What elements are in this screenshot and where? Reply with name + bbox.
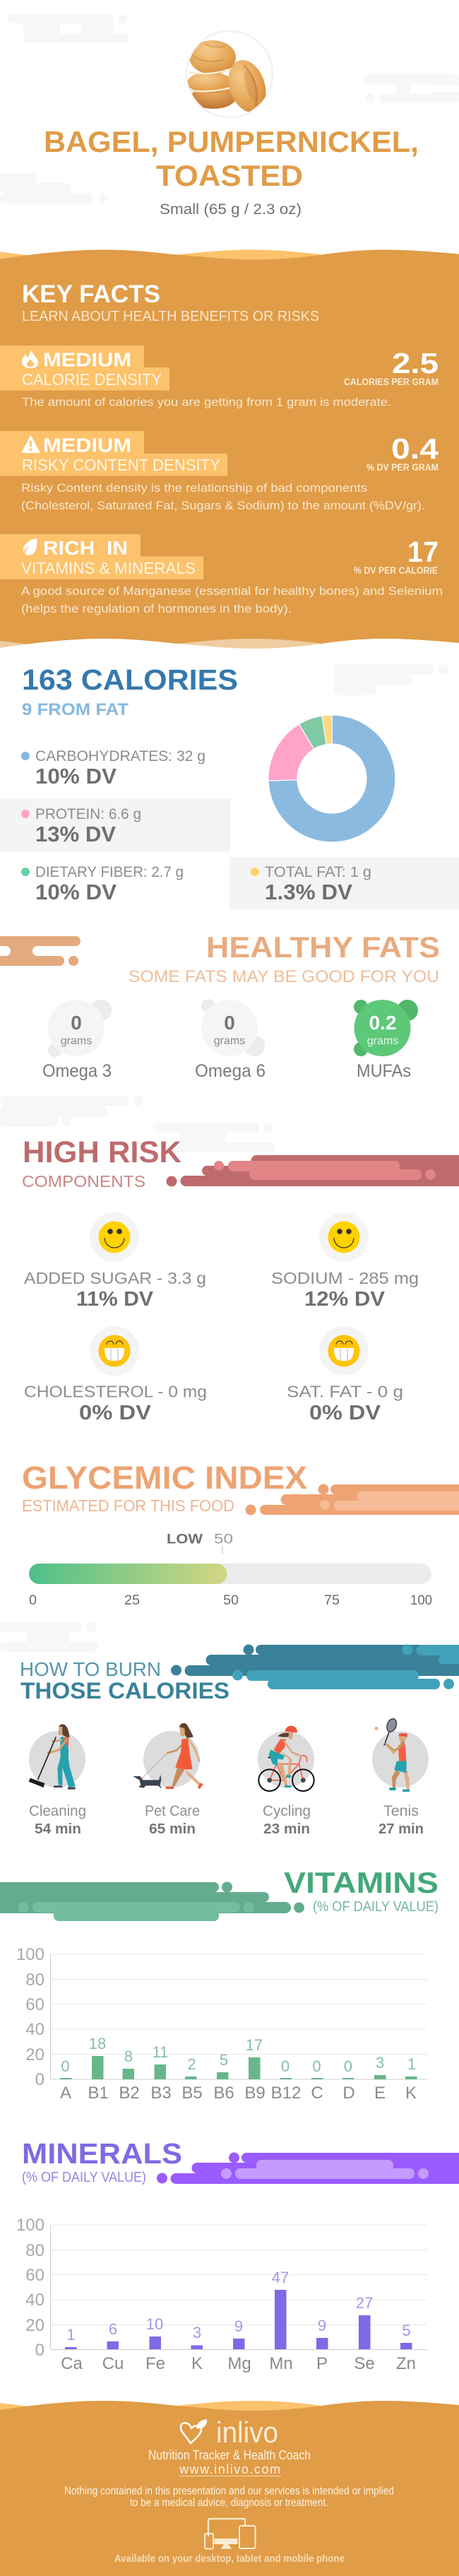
bar chart: vitamins: 20 [25, 2045, 44, 2064]
fact: vitamins and minerals: % DV PER CALORIE [354, 565, 438, 576]
fact: calorie density: MEDIUM [43, 349, 131, 370]
bar chart: minerals: Fe [145, 2354, 165, 2373]
gauge: glycemic index [29, 1532, 432, 1608]
heading: calories [22, 663, 238, 719]
logo: inlivo [181, 2416, 278, 2449]
heading: minerals [22, 2137, 182, 2185]
disclaimer [64, 2486, 394, 2509]
bar chart: minerals: P [316, 2354, 328, 2373]
heading: minerals: MINERALS [22, 2137, 182, 2170]
macro: protein: PROTEIN: 6.6 g [35, 806, 141, 822]
bar chart: minerals: 6 [109, 2320, 117, 2338]
disclaimer: Nothing contained in this presentation and our services is intended or implied [64, 2486, 394, 2497]
title: TOASTED [156, 159, 303, 192]
activity: cycling [258, 1726, 314, 1791]
activity labels: Cycling [263, 1803, 311, 1819]
risk item: saturated fat [287, 1326, 403, 1424]
fat item: omega 3: grams [61, 1035, 92, 1047]
fat item: MUFAs: 0.2 [369, 1012, 396, 1034]
risk item: added sugar: ADDED SUGAR - 3.3 g [24, 1269, 206, 1287]
gauge: glycemic index: 25 [124, 1593, 140, 1608]
risk item: cholesterol: CHOLESTEROL - 0 mg [24, 1382, 207, 1400]
macro: dietary fiber [21, 864, 184, 904]
activity labels: Pet Care [145, 1803, 200, 1819]
title: BAGEL, PUMPERNICKEL, [44, 125, 419, 158]
macro: carbohydrates [21, 748, 205, 788]
bar chart: vitamins: B6 [213, 2084, 234, 2103]
heading: glycemic index [22, 1460, 307, 1515]
risk item: added sugar: 11% DV [76, 1288, 154, 1311]
bar chart: minerals: Se [354, 2354, 375, 2373]
activity: pet care [133, 1723, 203, 1789]
gauge: glycemic index: 50 [214, 1532, 233, 1547]
fact: vitamins and minerals: RICH IN [43, 537, 128, 559]
bar chart: vitamins: B5 [181, 2084, 203, 2103]
fat item: MUFAs: MUFAs [357, 1061, 411, 1081]
fact: calorie density: CALORIES PER GRAM [344, 377, 439, 387]
website link: www.inlivo.com [179, 2462, 280, 2476]
bar chart: vitamins: 17 [246, 2036, 263, 2054]
bar chart: vitamins: E [374, 2084, 386, 2103]
risk item: added sugar [24, 1212, 206, 1311]
bar chart: minerals: 9 [234, 2317, 243, 2335]
bar chart: vitamins: K [405, 2084, 417, 2103]
risk item: sodium: SODIUM - 285 mg [271, 1269, 419, 1287]
heading: key facts: LEARN ABOUT HEALTH BENEFITS OR RISKS [22, 309, 319, 324]
fat item: MUFAs [354, 1000, 418, 1081]
fact: vitamins and minerals: (helps the regulation of hormones in the body). [21, 603, 292, 615]
donut chart: macronutrients [268, 715, 395, 842]
bar chart: minerals: K [191, 2354, 203, 2373]
panel: total fat background [230, 857, 459, 909]
bar chart: minerals: 47 [272, 2269, 289, 2286]
activity: tennis [372, 1718, 429, 1792]
heading: vitamins: (% OF DAILY VALUE) [313, 1899, 439, 1915]
heading: high risk [22, 1135, 181, 1190]
bar chart: minerals: 0 [35, 2341, 44, 2360]
fat item: omega 3 [42, 1000, 112, 1081]
bar chart: vitamins: 0 [61, 2057, 70, 2075]
fat item: omega 3: Omega 3 [42, 1061, 112, 1081]
fat item: omega 6: 0 [224, 1012, 235, 1034]
bar chart: vitamins: 2 [187, 2055, 196, 2073]
fact: risky content density: Risky Content density is the relationship of bad components [21, 482, 367, 495]
fact: calorie density: 2.5 [392, 347, 439, 379]
fact: risky content density: 0.4 [391, 432, 439, 465]
macro: dietary fiber: DIETARY FIBER: 2.7 g [35, 864, 184, 880]
activity: cleaning [29, 1724, 85, 1790]
macro: total fat: TOTAL FAT: 1 g [265, 864, 371, 880]
bar chart: vitamins: 0 [312, 2057, 321, 2075]
risk item: sodium: 12% DV [304, 1288, 386, 1311]
bar chart: vitamins: B1 [88, 2084, 109, 2103]
heading: vitamins [284, 1866, 439, 1915]
decoration: burn calories [171, 1645, 459, 1689]
fact: vitamins and minerals: A good source of Manganese (essential for healthy bones) and Selenium [21, 585, 443, 598]
logo: inlivo: inlivo [216, 2416, 278, 2449]
bar chart: vitamins: 0 [281, 2057, 290, 2075]
bar chart: vitamins: 0 [344, 2057, 352, 2075]
fact: calorie density [0, 345, 439, 408]
bar chart: vitamins: 100 [16, 1945, 44, 1964]
heading: how to burn: THOSE CALORIES [20, 1678, 230, 1703]
macro: carbohydrates: CARBOHYDRATES: 32 g [35, 748, 205, 764]
bar chart: minerals: 5 [402, 2322, 411, 2339]
bar chart: vitamins: C [311, 2084, 323, 2103]
bar chart: minerals: 27 [356, 2294, 373, 2312]
tagline: Nutrition Tracker & Health Coach [148, 2448, 311, 2462]
bar chart: minerals: Zn [396, 2354, 416, 2373]
risk item: saturated fat: SAT. FAT - 0 g [287, 1382, 403, 1400]
bar chart: vitamins: 5 [220, 2051, 228, 2069]
activity labels [29, 1803, 424, 1837]
fat item: omega 6: Omega 6 [195, 1061, 266, 1081]
heading: key facts: KEY FACTS [22, 280, 160, 308]
fat item: omega 6 [195, 999, 266, 1081]
bar chart: minerals: 100 [16, 2216, 44, 2235]
risk item: saturated fat: 0% DV [309, 1402, 381, 1424]
heading: key facts [22, 280, 319, 324]
heading: high risk: HIGH RISK [23, 1135, 181, 1169]
decoration: vitamins [0, 1882, 304, 1921]
heading: glycemic index: GLYCEMIC INDEX [22, 1460, 307, 1496]
gauge: glycemic index: 75 [324, 1593, 340, 1608]
fact: vitamins and minerals: VITAMINS & MINERALS [21, 559, 196, 577]
bar chart: minerals: Mg [227, 2354, 251, 2373]
gauge: glycemic index: 50 [223, 1593, 239, 1608]
heading: healthy fats: SOME FATS MAY BE GOOD FOR YOU [129, 967, 439, 986]
heading: calories: 163 CALORIES [22, 663, 238, 696]
risk item: cholesterol: 0% DV [79, 1402, 152, 1424]
fat item: omega 6: grams [214, 1035, 245, 1047]
fact: risky content density: RISKY CONTENT DENSITY [22, 456, 220, 474]
bar chart: vitamins: 18 [89, 2035, 106, 2052]
bar chart: vitamins: 0 [35, 2070, 44, 2089]
heading: glycemic index: ESTIMATED FOR THIS FOOD [22, 1496, 234, 1515]
bar chart: vitamins: B9 [244, 2084, 266, 2103]
bar chart: minerals: Mn [269, 2354, 293, 2373]
fact: risky content density: (Cholesterol, Saturated Fat, Sugars & Sodium) to the amount (%DV/gr). [21, 500, 425, 512]
heading: healthy fats: HEALTHY FATS [206, 930, 440, 964]
bar chart: minerals: 10 [146, 2315, 163, 2333]
serving size: Small (65 g / 2.3 oz) [160, 201, 302, 218]
bar chart: minerals: 3 [193, 2324, 201, 2341]
heading: healthy fats [129, 930, 440, 986]
bar chart: vitamins [16, 1945, 427, 2103]
bar chart: minerals: Ca [61, 2354, 83, 2373]
fact: calorie density: The amount of calories you are getting from 1 gram is moderate. [22, 396, 391, 408]
heading: how to burn: HOW TO BURN [20, 1658, 161, 1680]
heading: vitamins: VITAMINS [284, 1866, 439, 1899]
bar chart: minerals [16, 2216, 427, 2373]
bar chart: minerals: 80 [25, 2241, 44, 2260]
decoration: healthy fats [0, 936, 81, 966]
bar chart: vitamins: D [342, 2084, 355, 2103]
decoration: glycemic index [246, 1484, 459, 1515]
icon: devices [205, 2519, 256, 2549]
macro: total fat: 1.3% DV [265, 880, 352, 904]
risk item: sodium [271, 1212, 419, 1311]
title [44, 125, 419, 192]
heading: high risk: COMPONENTS [22, 1172, 145, 1190]
bar chart: minerals: 9 [318, 2317, 326, 2334]
bar chart: vitamins: 80 [25, 1971, 44, 1990]
activity labels: 23 min [263, 1821, 310, 1837]
macro: total fat [251, 864, 371, 904]
bar chart: vitamins: B2 [119, 2084, 140, 2103]
panel: footer [0, 2401, 459, 2576]
bar chart: minerals: 60 [25, 2266, 44, 2285]
fact: calorie density: CALORIE DENSITY [22, 370, 162, 389]
bar chart: minerals: Cu [102, 2354, 124, 2373]
heading: calories: 9 FROM FAT [22, 700, 129, 719]
macro: carbohydrates: 10% DV [35, 764, 117, 788]
bar chart: minerals: 1 [66, 2326, 76, 2344]
activity labels: 27 min [378, 1821, 424, 1837]
bar chart: minerals: 20 [25, 2316, 44, 2335]
gauge: glycemic index: LOW [167, 1532, 203, 1547]
heading: minerals: (% OF DAILY VALUE) [22, 2170, 146, 2185]
decoration: minerals [157, 2152, 459, 2184]
gauge: glycemic index: 100 [410, 1593, 432, 1608]
gauge: glycemic index: 0 [29, 1593, 37, 1608]
bar chart: vitamins: 11 [153, 2043, 168, 2061]
fat item: omega 3: 0 [71, 1012, 82, 1034]
activity labels: 54 min [35, 1821, 81, 1837]
risk item: cholesterol [24, 1326, 207, 1424]
activity labels: Tenis [383, 1803, 419, 1819]
disclaimer: to be a medical advice, diagnosis or treatment. [130, 2497, 328, 2509]
macro: dietary fiber: 10% DV [35, 880, 117, 904]
bar chart: vitamins: 1 [407, 2055, 416, 2073]
activity labels: Cleaning [29, 1803, 86, 1819]
bar chart: vitamins: 40 [25, 2020, 44, 2039]
fat item: MUFAs: grams [367, 1035, 398, 1047]
bar chart: vitamins: A [60, 2084, 71, 2103]
availability note: Available on your desktop, tablet and mobile phone [114, 2553, 345, 2565]
macro: protein: 13% DV [35, 822, 116, 846]
macro: protein [21, 806, 141, 846]
bar chart: minerals: 40 [25, 2291, 44, 2310]
bar chart: vitamins: 60 [25, 1995, 44, 2014]
fact: risky content density: MEDIUM [43, 434, 131, 456]
fact: vitamins and minerals [0, 534, 443, 615]
heading: how to burn [20, 1658, 230, 1703]
bar chart: vitamins: 3 [376, 2054, 384, 2072]
fact: vitamins and minerals: 17 [407, 536, 439, 568]
bar chart: vitamins: B12 [271, 2084, 301, 2103]
decoration: high risk [167, 1155, 459, 1187]
fact: risky content density [0, 431, 439, 512]
food image: bagels [186, 31, 273, 117]
activity labels: 65 min [149, 1821, 196, 1837]
fact: risky content density: % DV PER GRAM [366, 462, 439, 473]
panel: key facts [0, 250, 459, 661]
bar chart: vitamins: B3 [150, 2084, 172, 2103]
panel: protein background [0, 799, 230, 851]
bar chart: vitamins: 8 [124, 2048, 133, 2065]
